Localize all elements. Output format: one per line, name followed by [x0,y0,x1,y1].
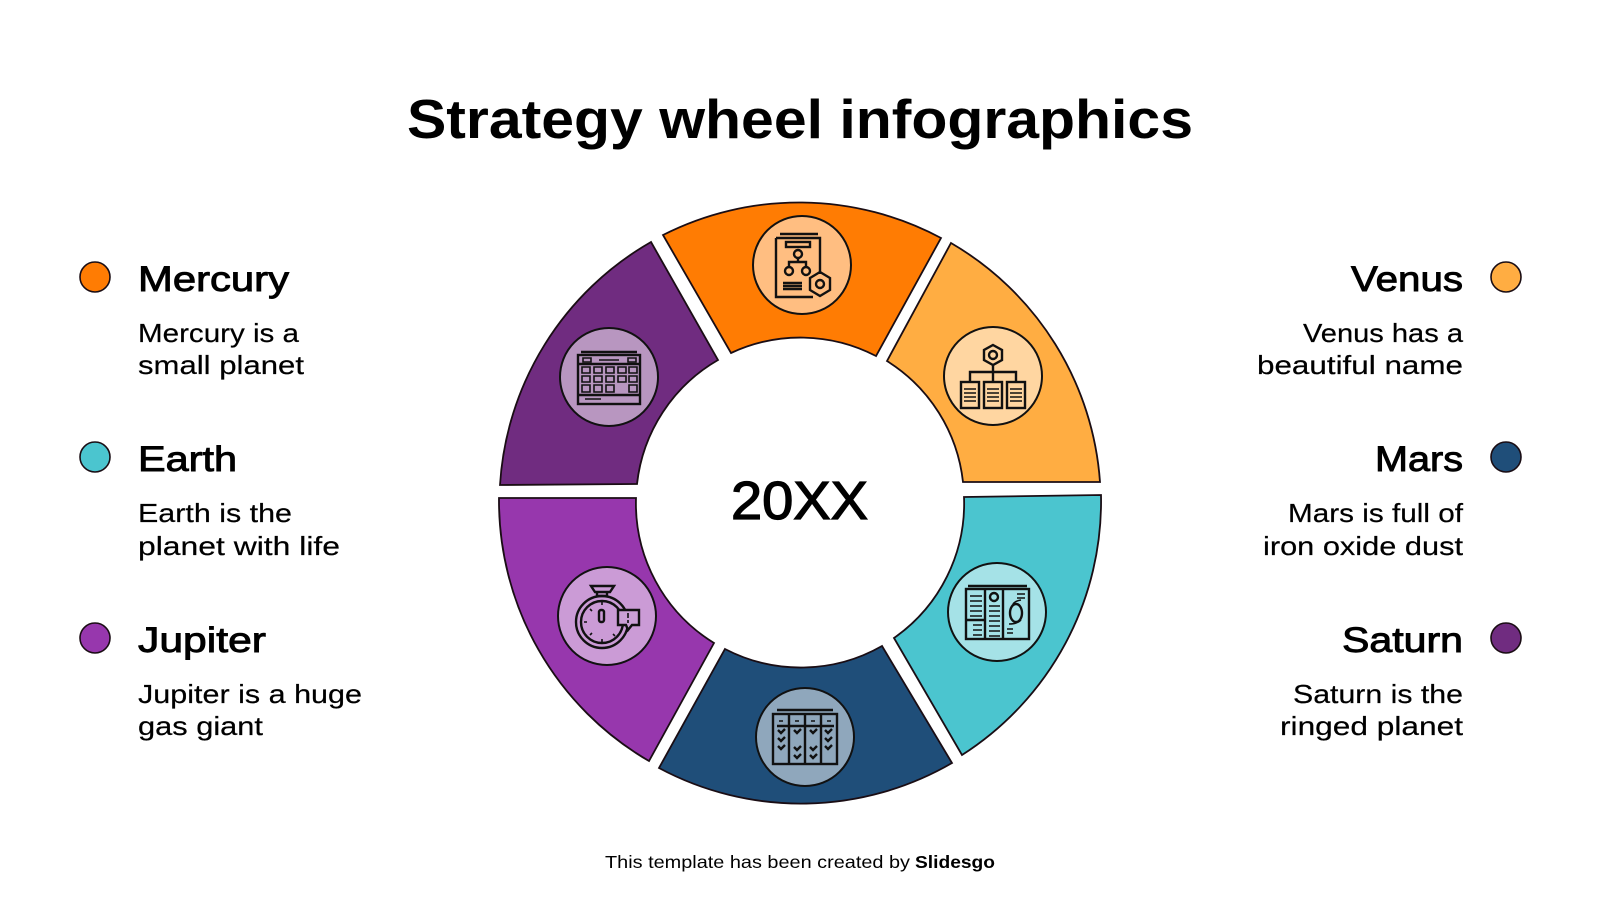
segment: Neptune dark purple [500,242,718,485]
legend: Venus: Venus has a [1303,318,1464,348]
legend: Saturn: Saturn is the [1293,679,1463,709]
legend: Venus: Venus [1351,260,1463,299]
segment: Jupiter purple [499,498,714,761]
legend: Jupiter: gas giant [138,711,264,741]
legend: Earth: Earth [138,440,237,479]
icon: checklist table [773,710,837,764]
segment: Saturn navy [659,646,952,804]
legend: Mercury: Mercury is a [138,318,300,348]
legend: Saturn: ringed planet [1280,711,1464,741]
segment: Venus light orange [887,243,1100,482]
legend: Saturn: Saturn [1342,621,1463,660]
title: Strategy wheel infographics [407,88,1193,150]
legend: Jupiter: Jupiter is a huge [138,679,362,709]
legend: Mercury: Mercury [138,260,290,299]
legend: Earth [80,440,340,561]
legend: Mars: iron oxide dust [1263,531,1464,561]
legend: Jupiter: Jupiter [138,621,266,660]
icon: gear with three documents [961,345,1025,408]
legend: Mars [1263,440,1521,561]
legend: Jupiter [80,621,362,741]
legend: Venus: beautiful name [1257,350,1463,380]
legend: Earth: Earth is the [138,498,292,528]
strategy wheel [499,202,1101,804]
icon: brochure [966,586,1029,639]
segment: Mars teal [894,495,1101,755]
center label: 20XX [731,471,868,531]
legend: Earth: planet with life [138,531,340,561]
legend: Mars: Mars [1375,440,1463,479]
icon: stopwatch with alert bubble [576,586,639,648]
footer credit: Slidesgo [915,852,995,872]
footer credit: This template has been created by [605,852,910,872]
legend: Saturn [1280,621,1521,741]
icon: calendar grid [578,352,640,404]
legend: Mars: Mars is full of [1288,498,1464,528]
legend: Mercury [80,260,305,380]
legend: Venus [1257,260,1521,380]
icon: document with org chart and gear [776,234,830,297]
footer credit [605,852,995,872]
segment: Mercury orange [663,202,941,356]
legend: Mercury: small planet [138,350,305,380]
